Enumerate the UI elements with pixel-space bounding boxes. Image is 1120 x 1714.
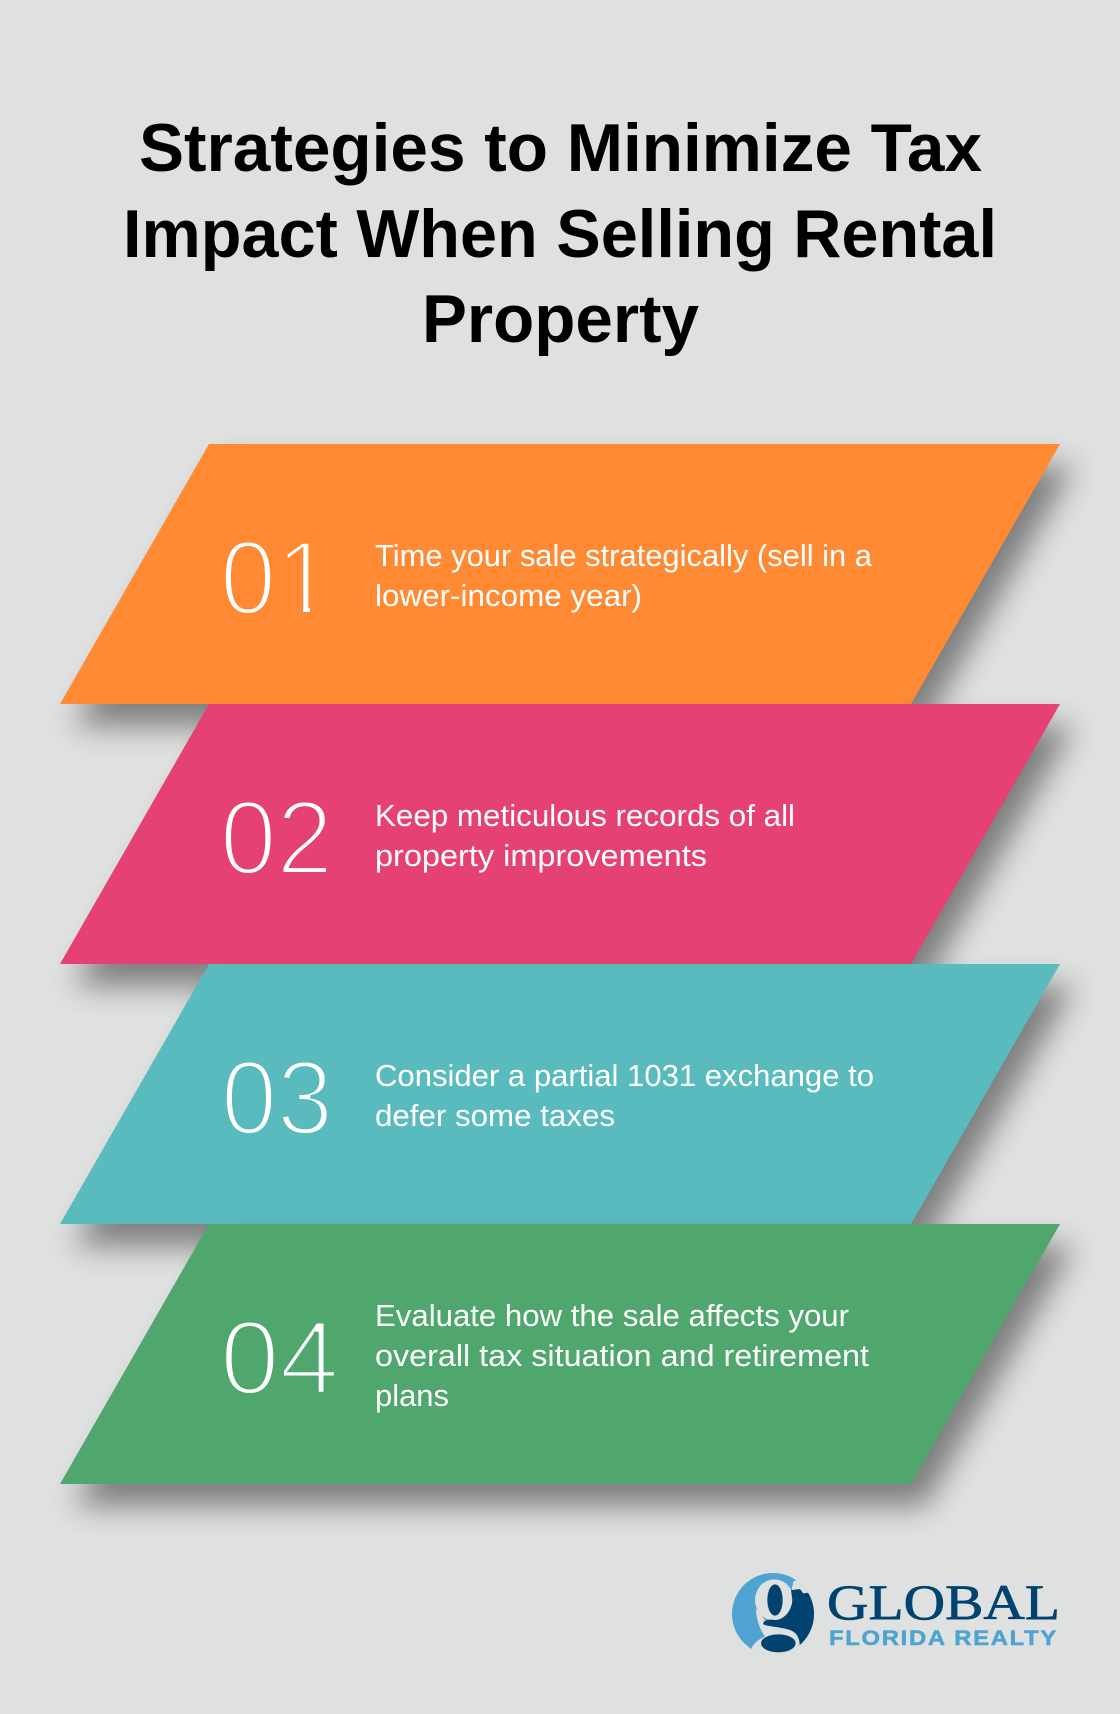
icon: g monogram	[732, 1573, 814, 1655]
title	[123, 110, 997, 357]
text: step 02: Keep meticulous records of all	[375, 798, 795, 833]
text: step 04: Evaluate how the sale affects your	[375, 1298, 849, 1333]
text: step 02: property improvements	[375, 838, 707, 873]
panel: step 04	[60, 1224, 1074, 1506]
text: step 01: lower-income year)	[375, 578, 642, 613]
title: Impact When Selling Rental	[123, 196, 997, 272]
text: step 04	[375, 1298, 869, 1413]
wordmark: GLOBAL: GLOBAL	[827, 1574, 1060, 1630]
logo: Global Florida Realty	[732, 1573, 1060, 1660]
text: step 01: Time your sale strategically (sell in a	[375, 538, 873, 573]
title: Property	[422, 281, 699, 357]
number 02: 02	[220, 780, 333, 897]
text: step 04: plans	[375, 1378, 449, 1413]
text: step 03	[375, 1058, 874, 1133]
title: Strategies to Minimize Tax	[139, 110, 982, 186]
text: step 01	[375, 538, 873, 613]
wordmark: FLORIDA REALTY: FLORIDA REALTY	[829, 1627, 1058, 1650]
text: step 03: Consider a partial 1031 exchange to	[375, 1058, 874, 1093]
panel: step 01	[60, 444, 1074, 726]
text: step 04: overall tax situation and retirement	[375, 1338, 869, 1373]
text: step 02	[375, 798, 795, 873]
panel: step 02	[60, 704, 1074, 986]
number 03: 03	[221, 1040, 333, 1157]
number 04: 04	[220, 1300, 339, 1417]
text: step 03: defer some taxes	[375, 1098, 615, 1133]
panel: step 03	[60, 964, 1074, 1246]
number 01: 01	[220, 520, 332, 637]
